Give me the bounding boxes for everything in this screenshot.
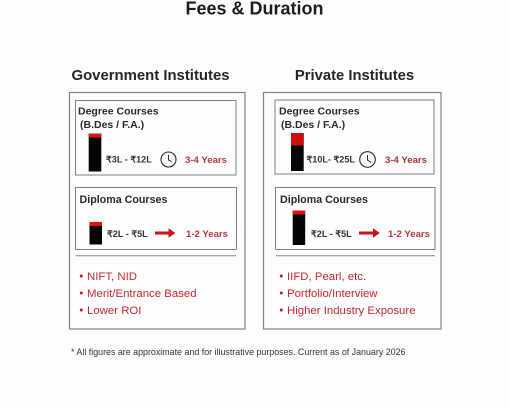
bullet list — [280, 271, 416, 317]
fee bar — [293, 210, 305, 245]
fee bar — [291, 133, 304, 171]
bullet list: Portfolio/Interview — [287, 288, 378, 300]
degree heading: Degree Courses — [279, 106, 360, 118]
panel: government institutes — [70, 92, 245, 329]
footnote: * All figures are approximate and for illustrative purposes. Current as of January 2026 — [71, 347, 406, 357]
arrow — [155, 228, 175, 238]
duration: 1-2 Years — [388, 229, 430, 240]
duration: 3-4 Years — [185, 155, 227, 166]
arrow — [359, 228, 380, 238]
card: government diploma courses — [76, 188, 236, 250]
card: private degree courses — [275, 100, 434, 174]
bullet list: IIFD, Pearl, etc. — [287, 271, 366, 283]
fee bar — [90, 222, 102, 244]
bullet list: Higher Industry Exposure — [287, 305, 416, 317]
duration: 1-2 Years — [186, 229, 228, 240]
fee range: ₹2L - ₹5L — [311, 229, 352, 239]
degree subheading: (B.Des / F.A.) — [281, 119, 345, 131]
bullet list: NIFT, NID — [87, 271, 137, 283]
diploma heading: Diploma Courses — [280, 194, 368, 206]
fee range: ₹2L - ₹5L — [107, 229, 148, 239]
icon: clock — [360, 152, 375, 167]
fee range: ₹3L - ₹12L — [106, 155, 152, 165]
heading: government institutes: Government Institutes — [71, 68, 230, 84]
degree heading: Degree Courses — [78, 106, 159, 118]
heading: private institutes: Private Institutes — [295, 68, 414, 84]
bullet list: Merit/Entrance Based — [87, 288, 197, 300]
fee range: ₹10L- ₹25L — [306, 155, 355, 165]
diploma heading: Diploma Courses — [80, 194, 167, 206]
card: private diploma courses — [276, 188, 435, 250]
bullet list: Lower ROI — [87, 305, 141, 317]
degree subheading: (B.Des / F.A.) — [80, 119, 144, 131]
icon: clock — [161, 152, 176, 167]
duration: 3-4 Years — [385, 155, 427, 166]
fee bar — [89, 134, 101, 172]
panel: private institutes — [264, 92, 441, 329]
bullet list — [80, 271, 197, 317]
card: government degree courses — [76, 100, 236, 175]
